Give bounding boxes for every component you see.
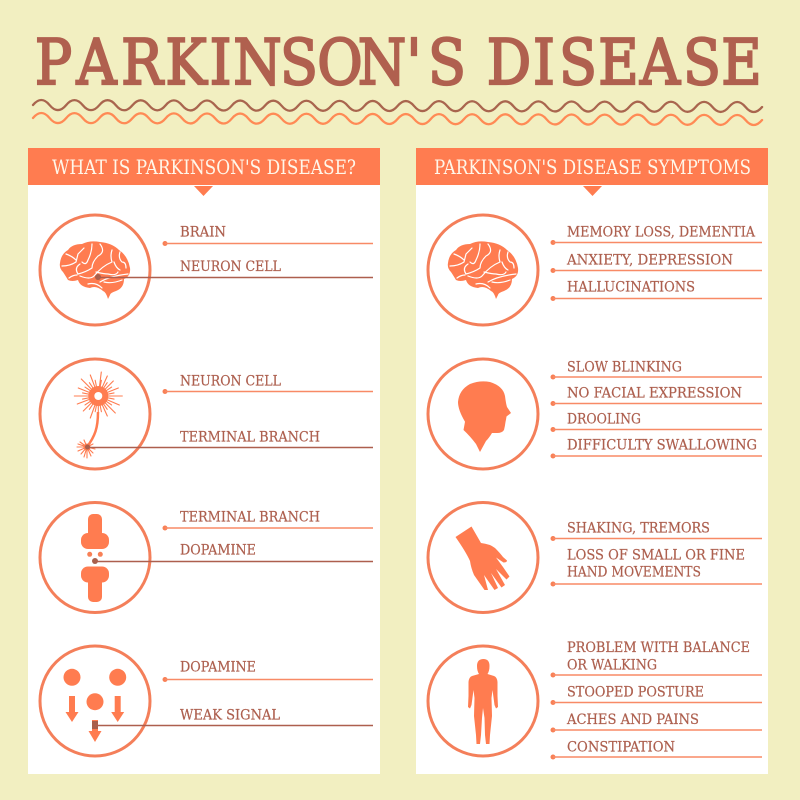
- symptom list: body: ACHES AND PAINS: [566, 712, 699, 728]
- symptom list: hands: [550, 520, 762, 586]
- label: dopamine: DOPAMINE: [180, 542, 256, 558]
- panel heading: [28, 148, 380, 196]
- symptom list: body: STOOPED POSTURE: [567, 684, 704, 700]
- icon: head: [428, 359, 538, 469]
- symptom list: body: [550, 640, 762, 760]
- label: terminal branch 2: TERMINAL BRANCH: [180, 510, 320, 526]
- label: terminal branch 2: [162, 510, 373, 530]
- symptom list: body: CONSTIPATION: [567, 740, 675, 756]
- panel: what is parkinson's disease: [28, 148, 380, 774]
- symptom list: cognitive: HALLUCINATIONS: [567, 280, 695, 296]
- icon: brain: [40, 215, 150, 325]
- symptom list: hands: SHAKING, TREMORS: [567, 520, 710, 536]
- symptom list: face: DROOLING: [567, 412, 641, 428]
- label: neuron cell 2: NEURON CELL: [180, 374, 281, 390]
- symptom list: body: PROBLEM WITH BALANCE: [567, 640, 750, 656]
- icon: brain: [428, 215, 538, 325]
- symptom list: cognitive: MEMORY LOSS, DEMENTIA: [567, 224, 756, 240]
- symptom list: face: DIFFICULTY SWALLOWING: [567, 438, 757, 454]
- wavy underline: [33, 100, 762, 125]
- label: weak signal: WEAK SIGNAL: [180, 708, 280, 724]
- label: brain: [162, 224, 373, 246]
- icon: synapse: [40, 502, 150, 612]
- title: PARKINSON'S DISEASE: [35, 26, 762, 99]
- symptom list: face: NO FACIAL EXPRESSION: [567, 386, 742, 402]
- icon: neuron: [40, 359, 150, 469]
- panel heading: [416, 148, 768, 196]
- symptom list: hands: LOSS OF SMALL OR FINE: [567, 548, 745, 564]
- icon: body: [428, 646, 538, 756]
- icon: hand: [428, 502, 538, 612]
- label: dopamine 2: [162, 660, 373, 682]
- panel heading: WHAT IS PARKINSON'S DISEASE?: [52, 155, 356, 179]
- symptom list: cognitive: ANXIETY, DEPRESSION: [566, 252, 733, 268]
- label: brain: BRAIN: [180, 224, 226, 240]
- symptom list: face: [550, 360, 762, 458]
- label: dopamine 2: DOPAMINE: [180, 660, 256, 676]
- label: neuron cell 2: [162, 374, 373, 394]
- panel: symptoms: [416, 148, 768, 774]
- symptom list: cognitive: [550, 224, 762, 301]
- symptom list: body: OR WALKING: [567, 658, 657, 674]
- icon: dopamine signal: [40, 646, 150, 756]
- symptom list: face: SLOW BLINKING: [567, 360, 682, 376]
- label: neuron cell: NEURON CELL: [180, 259, 281, 275]
- symptom list: hands: HAND MOVEMENTS: [567, 564, 701, 580]
- label: terminal branch: TERMINAL BRANCH: [180, 430, 320, 446]
